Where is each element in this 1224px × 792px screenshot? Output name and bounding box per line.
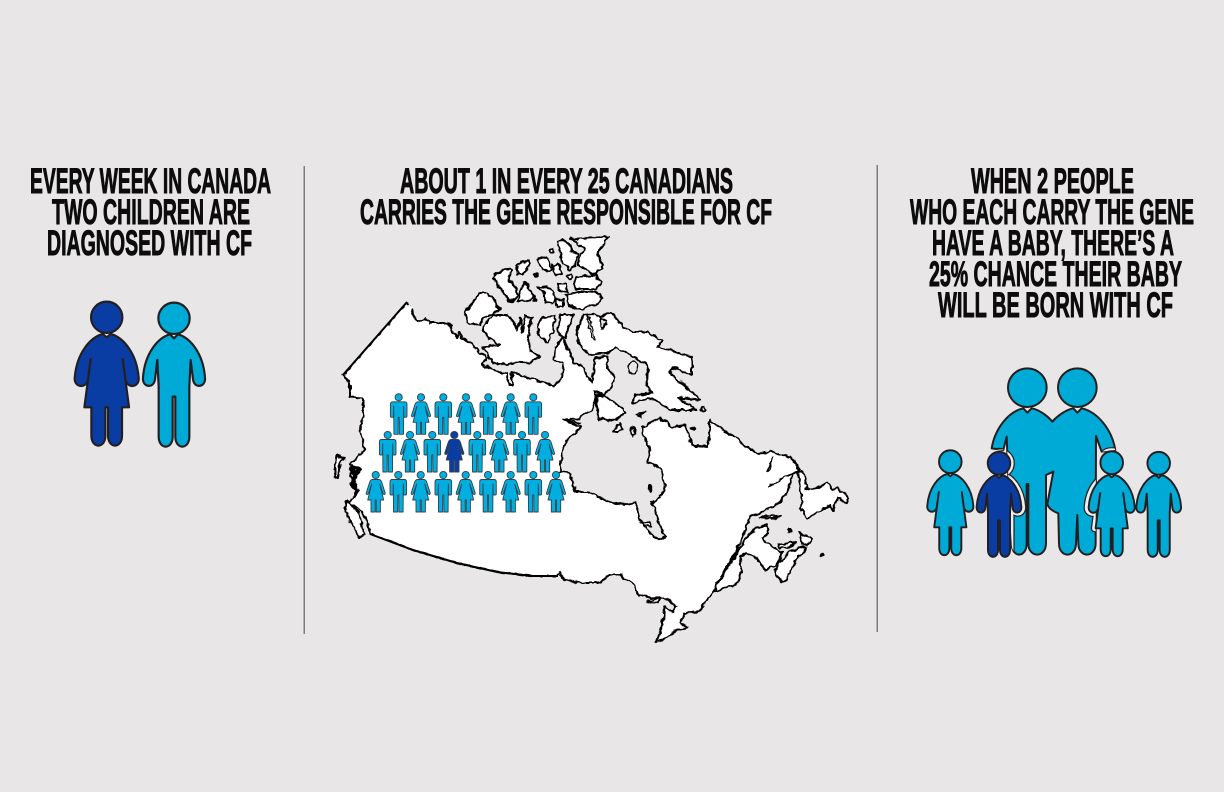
smaller Arctic islands — [492, 248, 824, 556]
heading: when 2 people — [910, 162, 1194, 325]
heading: about 1 in every 25 Canadians — [360, 162, 772, 232]
Ellesmere Island — [570, 237, 608, 275]
heading: every week in Canada: TWO CHILDREN ARE — [52, 193, 250, 232]
icon: family — [927, 368, 1181, 557]
Newfoundland — [798, 472, 847, 519]
icon: two children — [75, 302, 205, 447]
Prince Edward Island — [778, 542, 795, 548]
heading: about 1 in every 25 Canadians: ABOUT 1 IN EVERY 25 CANADIANS — [400, 162, 733, 201]
inland waters and coast detail — [350, 420, 793, 603]
icon: boy, light blue — [143, 303, 205, 447]
Nova Scotia — [775, 546, 807, 582]
people grid: 25 Canadians, one highlighted — [366, 394, 566, 512]
Haida Gwaii — [335, 455, 345, 478]
Prince of Wales Island — [537, 315, 555, 342]
mainland — [343, 302, 800, 642]
Cape Breton — [800, 532, 812, 545]
Baffin Island — [577, 312, 700, 410]
Victoria Island — [483, 315, 540, 365]
Banks Island — [465, 293, 500, 325]
icon: two parents — [990, 367, 1116, 556]
heading: about 1 in every 25 Canadians: CARRIES THE GENE RESPONSIBLE FOR CF — [360, 193, 772, 232]
heading: every week in Canada: DIAGNOSED WITH CF — [47, 224, 252, 263]
smooth southern border — [370, 530, 558, 580]
Devon Island — [567, 292, 602, 309]
Vancouver Island — [345, 502, 365, 537]
icon: child 3 — [1089, 451, 1135, 556]
heading: every week in Canada — [30, 162, 271, 263]
Anticosti — [760, 515, 782, 519]
New Brunswick and Gaspe — [713, 525, 782, 592]
Southampton Island — [597, 395, 626, 420]
icon: child with CF, dark blue — [977, 452, 1021, 557]
icon: child 1 — [927, 450, 973, 555]
icon: girl, dark blue — [75, 302, 139, 446]
icon: child 4 — [1136, 452, 1181, 557]
straight Alaska border — [341, 300, 411, 378]
Axel Heiberg Island — [558, 239, 578, 270]
Somerset Island — [558, 315, 573, 338]
map of Canada — [335, 237, 847, 642]
heading: every week in Canada: EVERY WEEK IN CANADA — [30, 162, 271, 201]
